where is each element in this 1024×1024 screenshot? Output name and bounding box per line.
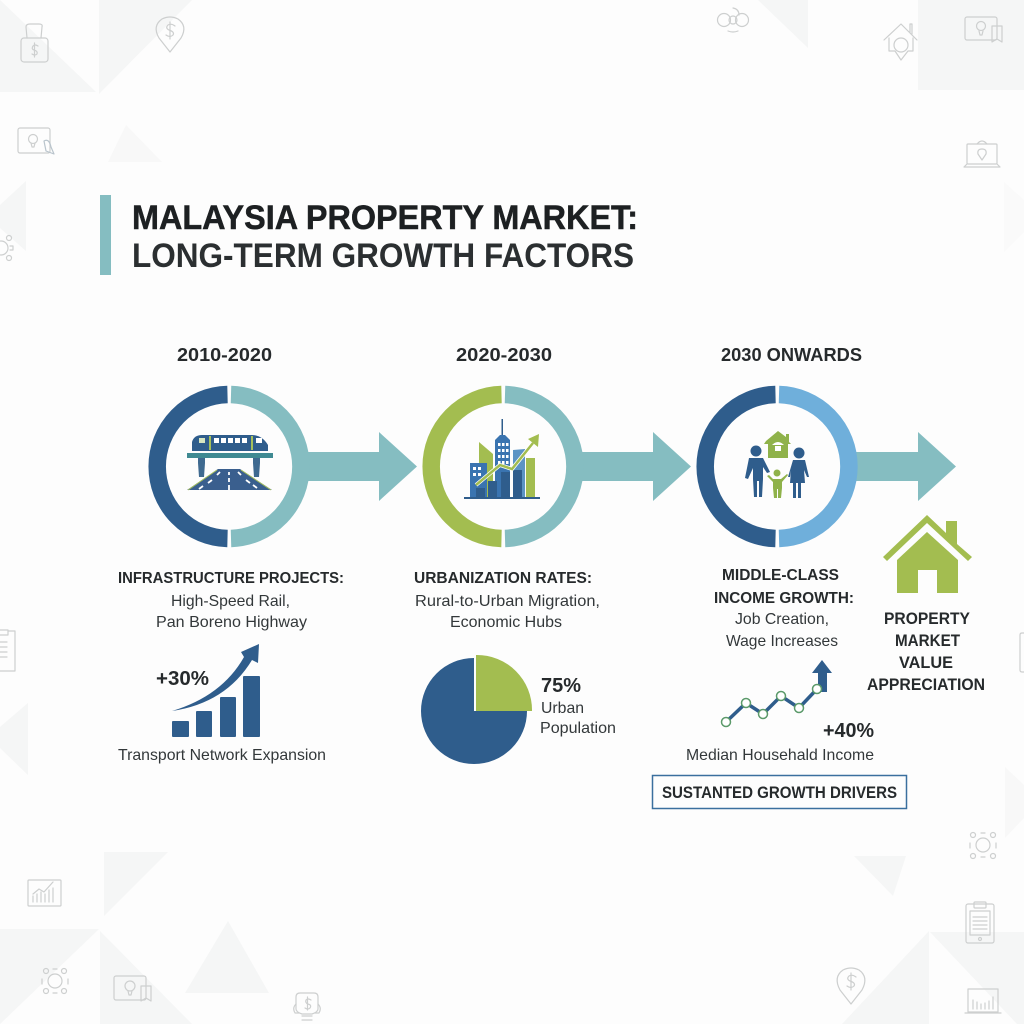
background icon: dollar pin	[156, 17, 184, 52]
background icon: gear left	[0, 236, 13, 260]
heading: middle-class income: MIDDLE-CLASS	[722, 567, 839, 584]
background icon: chart card	[28, 880, 61, 906]
background icon: coins	[718, 8, 748, 32]
text: infrastructure details: High-Speed Rail,	[171, 593, 290, 610]
title	[132, 199, 638, 275]
text: income details: Job Creation,	[735, 611, 829, 628]
heading: middle-class income: INCOME GROWTH:	[714, 590, 854, 607]
stat: 75% urban population: Population	[540, 720, 616, 737]
text: infrastructure details: Pan Boreno Highway	[156, 614, 307, 631]
title accent bar	[100, 195, 111, 275]
heading: middle-class income	[714, 567, 854, 607]
line chart: household income	[722, 660, 832, 726]
text: property market value appreciation: MARKET	[895, 631, 961, 650]
period label: 2010-2020: 2010-2020	[177, 345, 272, 365]
ring 3	[705, 395, 849, 538]
stat: +30%: +30%	[156, 668, 209, 690]
stat: 75% urban population: 75%	[541, 675, 581, 697]
heading: urbanization: URBANIZATION RATES:	[414, 570, 592, 587]
icon: city skyline with growth arrow	[464, 419, 540, 499]
background icon: clipboard left	[0, 630, 15, 671]
period label: 2020-2030: 2020-2030	[456, 345, 552, 365]
text: property market value appreciation: VALUE	[899, 653, 953, 672]
ring 1	[157, 395, 301, 538]
background icon: chart laptop	[965, 989, 1001, 1013]
background icon: money bag	[21, 24, 48, 62]
icon: family with house	[745, 431, 809, 498]
background icon: bulb card top right	[965, 17, 1002, 42]
text: income details	[726, 611, 838, 650]
arrow 1	[306, 432, 417, 501]
caption: transport network expansion: Transport Network Expansion	[118, 747, 326, 764]
arrow 2	[580, 432, 691, 501]
icon: property house	[883, 515, 972, 593]
ring 2	[431, 395, 575, 538]
background icon: bulb card	[18, 128, 54, 154]
callout: sustained growth drivers	[652, 776, 906, 808]
text: income details: Wage Increases	[726, 633, 838, 650]
stat: +40%: +40%	[823, 720, 874, 742]
background icon: clipboard tablet	[966, 902, 994, 943]
background icon: bulb card bottom	[114, 976, 151, 1001]
period label: 2030 onwards: 2030 ONWARDS	[721, 345, 862, 365]
heading: infrastructure: INFRASTRUCTURE PROJECTS:	[118, 570, 344, 587]
background icon: gear right	[970, 832, 996, 858]
title: MALAYSIA PROPERTY MARKET:	[132, 199, 638, 237]
background icon: dollar bulb	[294, 993, 320, 1020]
title: LONG-TERM GROWTH FACTORS	[132, 237, 634, 275]
text: urbanization details	[415, 593, 600, 631]
text: property market value appreciation: PROPERTY	[884, 609, 971, 628]
background icon: laptop	[964, 141, 1000, 167]
stat: 75% urban population	[540, 675, 616, 737]
background icon: gear bottom left	[42, 968, 68, 994]
text: urbanization details: Rural-to-Urban Migration,	[415, 593, 600, 610]
text: urbanization details: Economic Hubs	[450, 614, 562, 631]
arrow 3	[854, 432, 956, 501]
background icon: dollar pin bottom	[837, 968, 865, 1004]
callout: sustained growth drivers: SUSTANTED GROWTH DRIVERS	[662, 783, 897, 802]
text: property market value appreciation	[867, 609, 985, 694]
icon: train and highway	[187, 435, 273, 490]
text: property market value appreciation: APPRECIATION	[867, 675, 985, 694]
background icon: house pin	[884, 24, 917, 60]
text: infrastructure details	[156, 593, 307, 631]
pie chart: urban population	[421, 655, 532, 764]
stat: 75% urban population: Urban	[541, 700, 584, 717]
background icon: clipboard right edge	[1020, 633, 1024, 672]
bar chart: transport network	[172, 644, 260, 737]
caption: median household income: Median Househald Income	[686, 747, 874, 764]
